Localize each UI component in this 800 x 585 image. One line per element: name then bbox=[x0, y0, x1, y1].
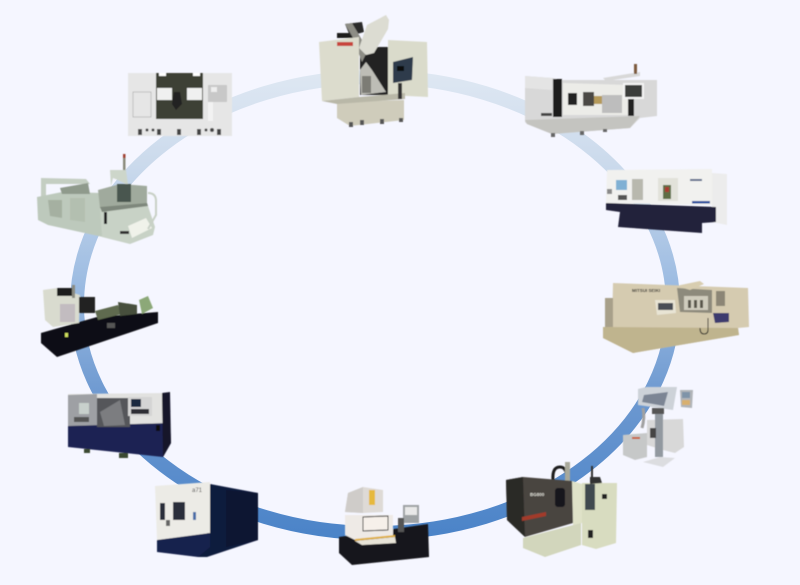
machine: cylindrical grinder, top right bbox=[525, 64, 657, 137]
machine: robot loaded vertical grinder, top bbox=[319, 15, 428, 127]
machine: navy horizontal machining centre a71: a71 bbox=[192, 488, 203, 494]
machine: wire EDM, bottom centre bbox=[339, 487, 429, 565]
machine: navy CNC lathe bbox=[68, 392, 171, 458]
machine: dark gear grinder with green cabinet bbox=[506, 462, 617, 557]
machine: dark gear grinder with green cabinet: BG800 bbox=[530, 492, 545, 497]
machine: beige Mitsui Seiki grinder: MITSUI SEIKI bbox=[632, 288, 660, 293]
machine: pale green transfer machine bbox=[37, 154, 156, 244]
machine: twin spindle lathe, square panel bbox=[128, 73, 232, 136]
machine: beige Mitsui Seiki grinder bbox=[603, 281, 749, 353]
ring connecting machines bbox=[77, 77, 673, 533]
machine: navy horizontal machining centre a71 bbox=[155, 482, 258, 557]
machine: long black lathe bbox=[41, 285, 158, 357]
machine: white and black grinder, right bbox=[606, 169, 727, 233]
machine: inspection unit on pedestal bbox=[623, 387, 693, 467]
